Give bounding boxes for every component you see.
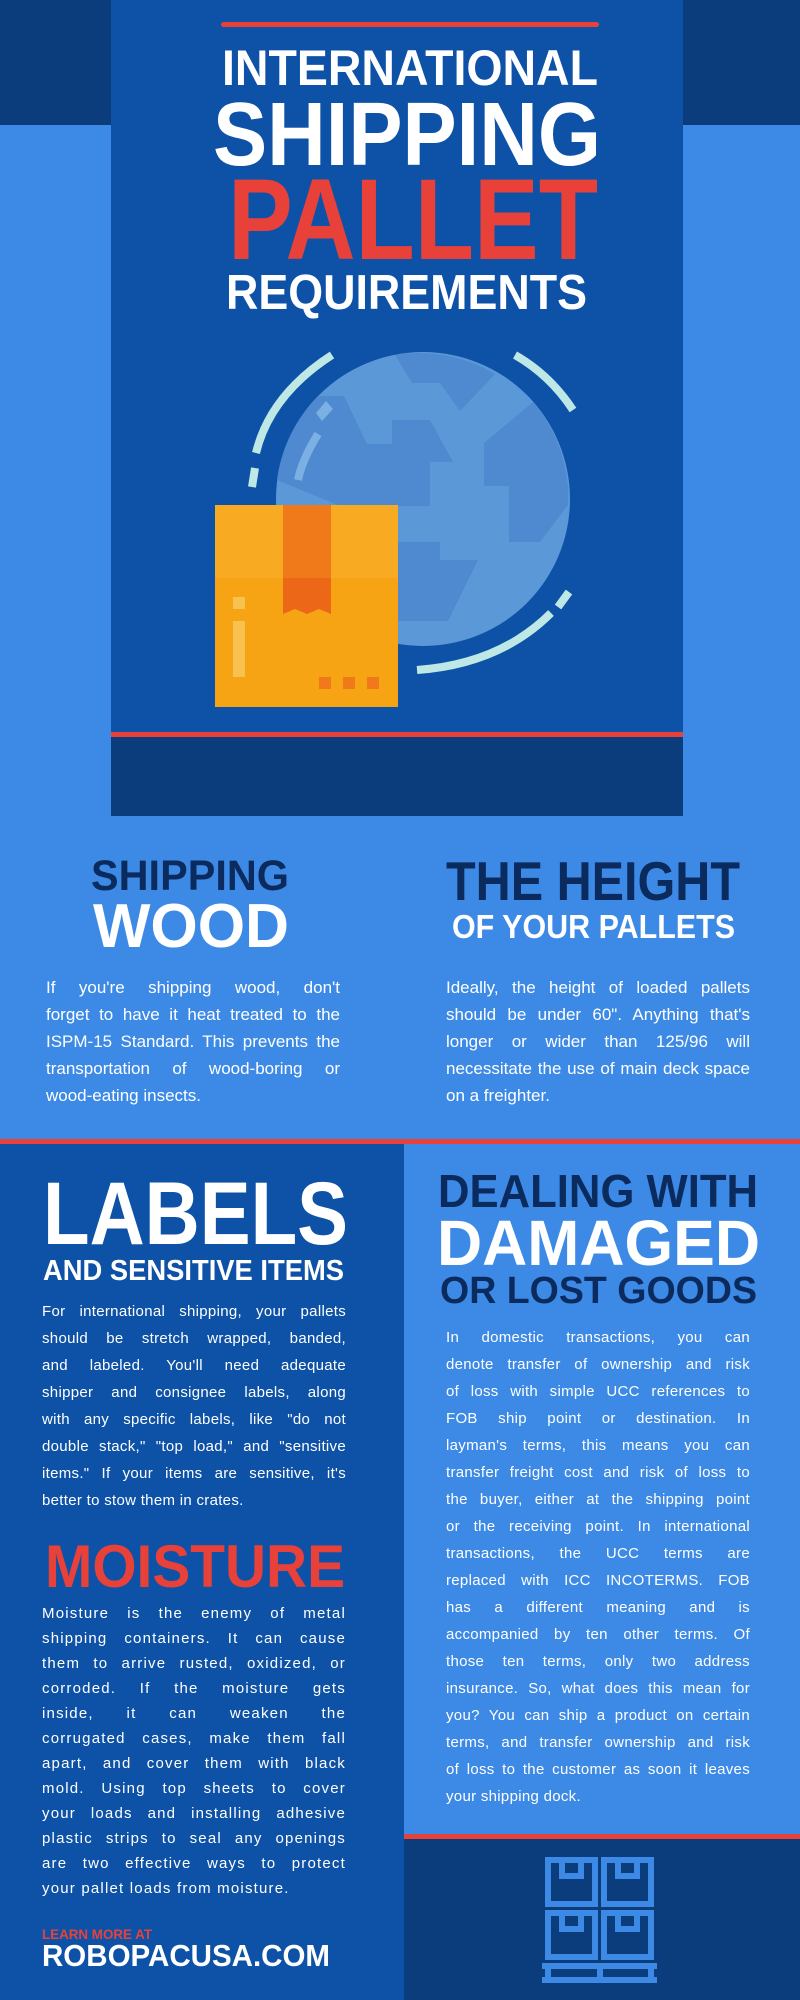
title: REQUIREMENTS [226,266,587,320]
text: moisture: shipping containers. It can cause [42,1630,346,1647]
title: PALLET [228,156,598,284]
text: moisture: corroded. If the moisture gets [42,1680,346,1697]
heading: moisture: MOISTURE [45,1533,345,1600]
text: damaged goods: FOB ship point or destination. In [446,1410,750,1427]
text: moisture: are two effective ways to protect [42,1855,346,1872]
text: labels: and labeled. You'll need adequate [42,1357,346,1374]
heading: dealing with damaged: DAMAGED [437,1207,760,1279]
text: damaged goods: transactions, the UCC terms are [446,1545,750,1562]
heading: the height of your pallets: OF YOUR PALLETS [452,908,735,945]
text: damaged goods: insurance. So, what does this mean for [446,1680,750,1697]
heading: shipping wood: SHIPPING [91,852,289,900]
text: labels: items." If your items are sensitive, it's [42,1465,346,1482]
heading: dealing with damaged: DEALING WITH [438,1165,758,1217]
text: moisture: your loads and installing adhesive [42,1805,346,1822]
text: damaged goods: denote transfer of ownership and risk [446,1356,750,1373]
footer: learn more: ROBOPACUSA.COM [42,1938,330,1973]
text: damaged goods: terms, and transfer ownership and risk [446,1734,750,1751]
text: height of pallets: Ideally, the height of loaded pallets [446,978,750,997]
text: damaged goods: layman's terms, this means you can [446,1437,750,1454]
text: shipping wood: wood-eating insects. [46,1086,201,1105]
heading: labels: AND SENSITIVE ITEMS [43,1255,344,1287]
text: labels: should be stretch wrapped, banded, [42,1330,346,1347]
heading: dealing with damaged [437,1165,760,1312]
text: damaged goods: your shipping dock. [446,1788,581,1805]
text: damaged goods: In domestic transactions, you can [446,1329,750,1346]
text: damaged goods: transfer freight cost and risk of loss to [446,1464,750,1481]
text: height of pallets: should be under 60". Anything that's [446,1005,750,1024]
text: moisture [42,1605,346,1897]
text: moisture: them to arrive rusted, oxidized, or [42,1655,346,1672]
text: moisture: your pallet loads from moisture. [42,1880,290,1897]
heading: the height of your pallets [446,850,740,945]
text: height of pallets [446,978,750,1105]
text: moisture: inside, it can weaken the [42,1705,346,1722]
text: labels: For international shipping, your pallets [42,1303,346,1320]
text: labels: with any specific labels, like "do not [42,1411,346,1428]
icon: box [215,505,398,707]
heading: shipping wood [91,852,289,961]
text: labels [42,1303,346,1509]
title: SHIPPING [213,85,601,185]
text: moisture: plastic strips to seal any openings [42,1830,346,1847]
text: damaged goods: of loss with simple UCC references to [446,1383,750,1400]
text: labels: better to stow them in crates. [42,1492,244,1509]
text: moisture: apart, and cover them with black [42,1755,346,1772]
text: shipping wood: forget to have it heat treated to the [46,1005,340,1024]
icon: pallet boxes [542,1860,657,1980]
text: moisture: corrugated cases, make them fall [42,1730,346,1747]
text: damaged goods: the buyer, either at the shipping point [446,1491,750,1508]
text: height of pallets: on a freighter. [446,1086,550,1105]
text: shipping wood: transportation of wood-boring or [46,1059,340,1078]
heading: the height of your pallets: THE HEIGHT [446,850,740,912]
text: damaged goods: of loss to the customer as soon it leaves [446,1761,750,1778]
text: moisture: mold. Using top sheets to cover [42,1780,346,1797]
text: damaged goods: or the receiving point. In international [446,1518,750,1535]
title [213,40,601,320]
heading: dealing with damaged: OR LOST GOODS [440,1270,757,1312]
text: labels: double stack," "top load," and "sensitive [42,1438,346,1455]
icon: globe [252,352,573,670]
text: moisture: Moisture is the enemy of metal [42,1605,346,1622]
text: shipping wood [46,978,340,1105]
text: damaged goods: accompanied by ten other terms. Of [446,1626,750,1643]
text: labels: shipper and consignee labels, along [42,1384,346,1401]
heading: labels: LABELS [43,1163,348,1263]
text: shipping wood: ISPM-15 Standard. This prevents the [46,1032,340,1051]
footer: learn more: LEARN MORE AT [42,1926,152,1942]
text: height of pallets: longer or wider than 125/96 will [446,1032,750,1051]
text: damaged goods: you? You can ship a product on certain [446,1707,750,1724]
text: damaged goods: has a different meaning and is [446,1599,750,1616]
text: damaged goods: replaced with ICC INCOTERMS. FOB [446,1572,750,1589]
text: damaged goods [446,1329,750,1805]
text: shipping wood: If you're shipping wood, don't [46,978,340,997]
title: INTERNATIONAL [222,40,598,96]
text: damaged goods: those ten terms, only two address [446,1653,750,1670]
heading: shipping wood: WOOD [93,892,289,961]
text: height of pallets: necessitate the use of main deck space [446,1059,750,1078]
